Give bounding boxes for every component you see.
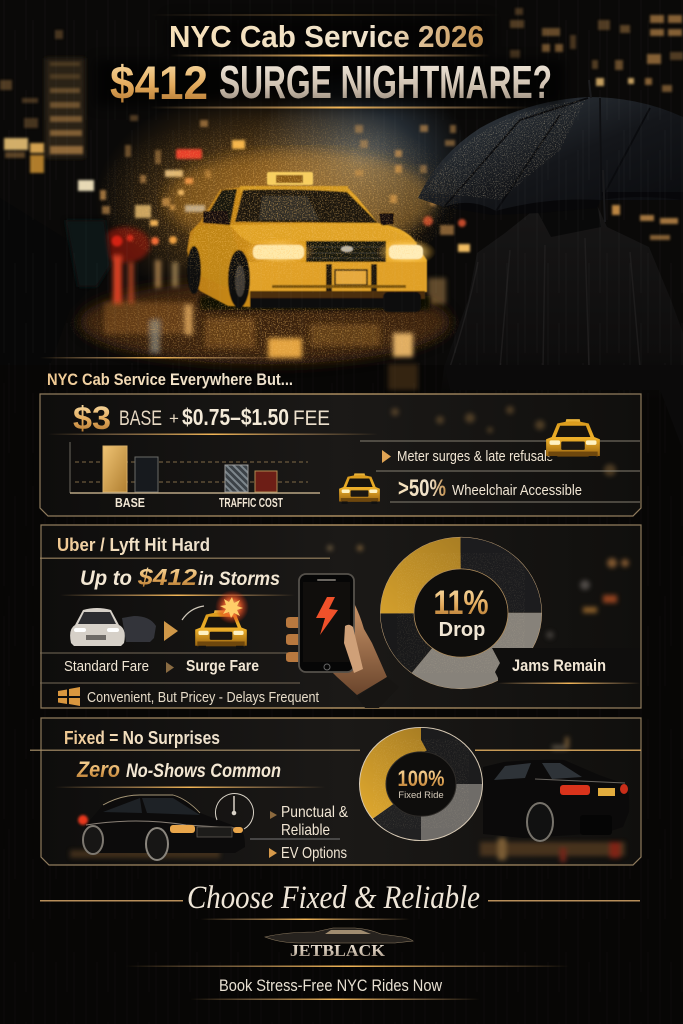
dark parked car left xyxy=(0,198,104,365)
city night backdrop xyxy=(0,0,683,365)
zero no-shows headline: Zero xyxy=(76,757,120,782)
umbrella and person xyxy=(418,80,683,400)
script heading: Choose Fixed & Reliable xyxy=(187,880,480,916)
feature list: Reliable xyxy=(281,822,330,839)
illustration: black sedan left xyxy=(78,795,245,860)
title price: $412 xyxy=(110,56,208,109)
feature list: EV Options xyxy=(281,845,347,862)
donut chart: 11 percent drop: Drop xyxy=(439,619,485,641)
donut chart: 11 percent drop xyxy=(380,537,542,689)
surge headline: Up to xyxy=(80,567,132,590)
fare labels xyxy=(64,658,259,675)
feature list: Punctual & xyxy=(281,804,348,821)
footer call to action xyxy=(40,880,640,1000)
fare headline: $3 xyxy=(73,400,111,436)
fare labels: Standard Fare xyxy=(64,658,149,675)
title block xyxy=(95,14,565,109)
wet road reflections xyxy=(70,255,460,365)
panel: uber and lyft xyxy=(40,525,641,708)
umbrella canopy xyxy=(418,97,683,211)
speckled wet surface xyxy=(70,285,460,365)
wheelchair stat: >50% xyxy=(398,475,446,502)
donut chart: 100 percent fixed ride: Fixed Ride xyxy=(398,790,444,801)
callout: jams remain xyxy=(492,648,640,684)
icon: surge taxi with spark xyxy=(182,590,249,649)
icon: standard fare cars xyxy=(70,608,156,646)
logo: jetblack car xyxy=(265,928,413,960)
wheelchair stat xyxy=(398,475,582,502)
fare headline: FEE xyxy=(293,407,330,430)
fare headline: + xyxy=(169,409,179,428)
taxi body xyxy=(187,187,427,307)
bar chart: TRAFFIC COST xyxy=(219,495,283,510)
callout: jams remain: Jams Remain xyxy=(512,656,606,675)
surge headline: $412 xyxy=(137,564,197,590)
surge headline: in Storms xyxy=(198,569,280,590)
illustration: hand holding phone xyxy=(286,574,399,708)
sparkling rain near the taxi xyxy=(100,110,460,280)
meter surges text: Meter surges & late refusals xyxy=(397,448,553,465)
panel heading: Uber / Lyft Hit Hard xyxy=(57,535,210,555)
booking line: Book Stress-Free NYC Rides Now xyxy=(219,977,442,995)
panel heading: Fixed = No Surprises xyxy=(64,728,220,748)
zero no-shows headline xyxy=(76,757,281,782)
convenience note: Convenient, But Pricey - Delays Frequent xyxy=(87,689,320,706)
fare headline: $0.75–$1.50 xyxy=(182,404,289,430)
fare headline xyxy=(73,400,330,436)
illustration: black sedan right xyxy=(483,760,629,841)
bar chart xyxy=(70,442,320,510)
fare headline: BASE xyxy=(119,407,162,430)
bar chart: BASE xyxy=(115,495,145,510)
surge headline xyxy=(80,564,280,590)
lower background rain streaks xyxy=(0,364,683,1024)
wheelchair stat: Wheelchair Accessible xyxy=(452,482,582,499)
red neon sign and tail lights xyxy=(112,149,466,246)
panel: cab fares xyxy=(40,394,641,516)
icon: window tiles xyxy=(58,687,80,706)
donut chart: 100 percent fixed ride: 100% xyxy=(398,766,444,791)
yellow taxi xyxy=(165,150,436,312)
donut chart: 11 percent drop: 11% xyxy=(434,584,488,622)
icon: taxi lower xyxy=(339,473,380,504)
section heading: cab service: NYC Cab Service Everywhere But... xyxy=(47,370,293,389)
icon: lightning bolt xyxy=(316,597,338,635)
fare labels: Surge Fare xyxy=(186,658,259,675)
panel: fixed rides xyxy=(30,718,641,865)
raindrops on canopy xyxy=(425,100,585,200)
icon: taxi top right xyxy=(546,419,600,459)
zero no-shows headline: No-Shows Common xyxy=(126,761,281,782)
icon: arrow xyxy=(164,621,178,641)
icon: arrow xyxy=(382,450,391,463)
hero scene: rainy city street xyxy=(0,0,683,400)
feature list xyxy=(269,804,348,862)
donut chart: 100 percent fixed ride xyxy=(359,727,483,841)
icon: clock xyxy=(215,794,253,829)
hood and taxi sparkle highlight xyxy=(190,228,422,290)
logo: jetblack car: JETBLACK xyxy=(290,941,386,960)
taxi roof sign xyxy=(267,172,313,185)
person in coat xyxy=(440,205,683,400)
title line one: NYC Cab Service 2026 xyxy=(169,19,484,54)
